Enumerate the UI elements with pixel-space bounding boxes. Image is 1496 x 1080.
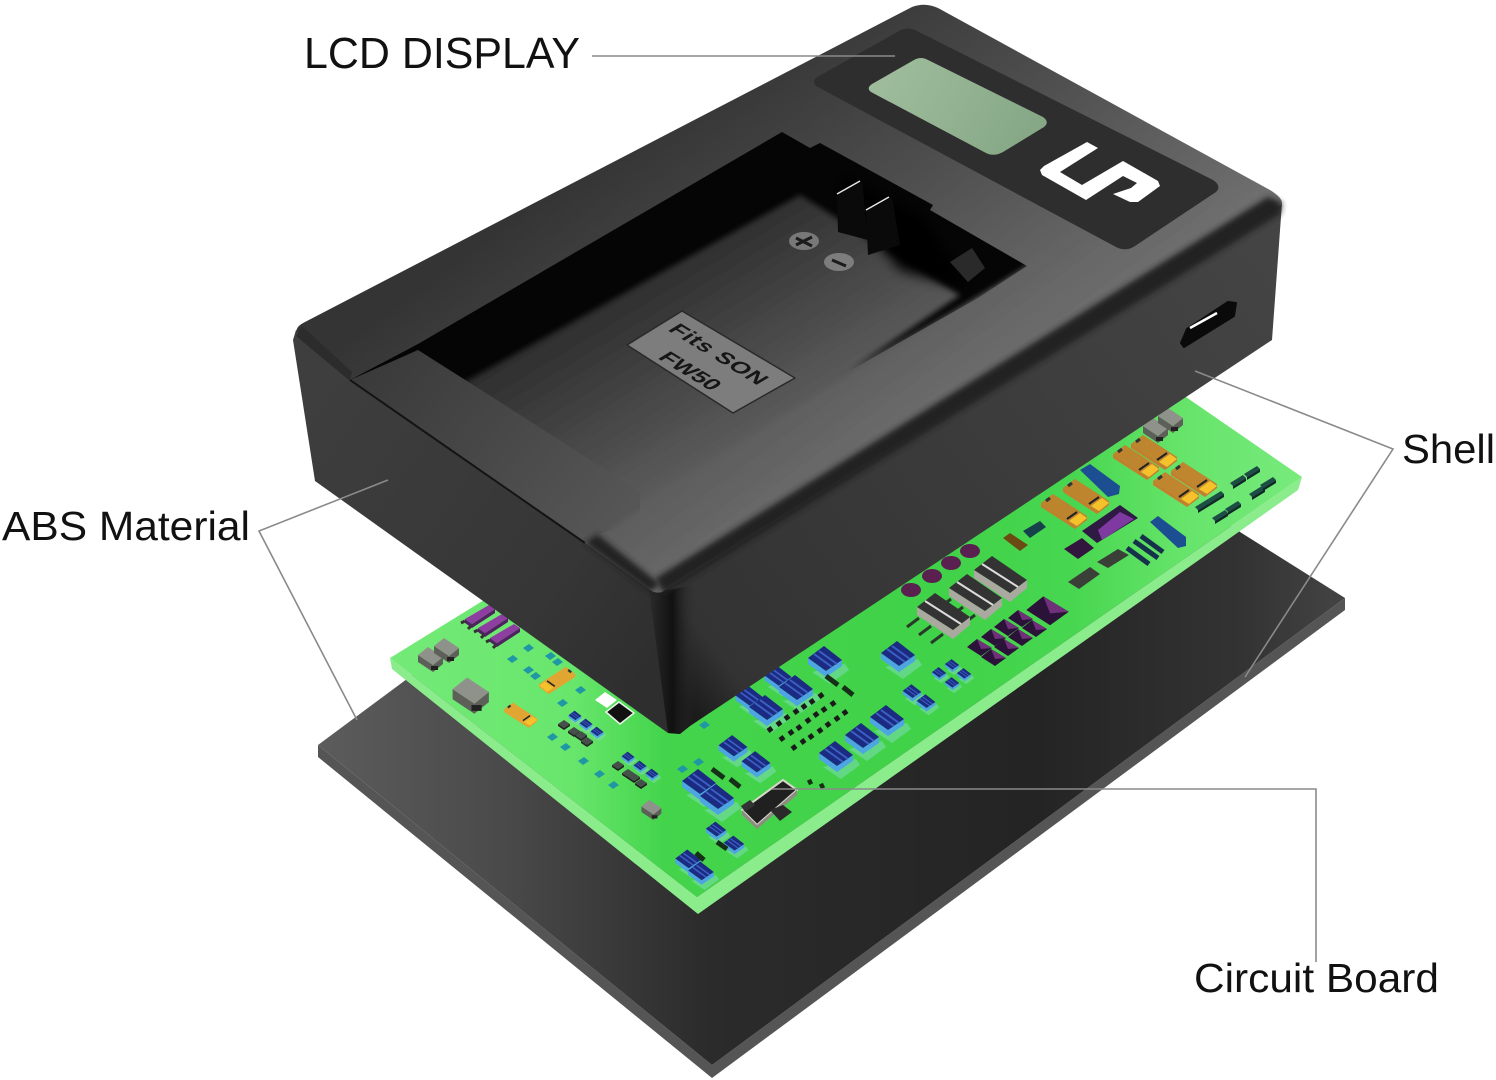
LP logo <box>1040 142 1160 202</box>
circuit board <box>390 395 1302 914</box>
silver parts right <box>1143 408 1183 443</box>
bottom plate <box>318 380 1345 1078</box>
cavity floor <box>458 195 1000 500</box>
dark corner chamfer <box>296 326 352 381</box>
polarity marks <box>789 232 854 271</box>
blue chips <box>675 641 974 890</box>
board front lip <box>390 477 1302 914</box>
circuit board callout <box>772 789 1439 1001</box>
label: Circuit Board: Circuit Board <box>1194 955 1439 1001</box>
top face front blend <box>610 190 1255 575</box>
top face <box>297 5 1282 593</box>
orange capacitors left <box>504 667 575 728</box>
label text: Fits SON <box>663 320 774 388</box>
black pad grid <box>768 694 847 749</box>
model text: FW50 <box>653 348 727 394</box>
left side face <box>293 330 690 733</box>
teal tiny parts <box>507 644 710 789</box>
small blue parts left <box>558 711 661 820</box>
right side face <box>657 203 1282 734</box>
board top face <box>390 395 1302 897</box>
silver inductors <box>418 638 489 714</box>
teal pairs right <box>1195 466 1276 524</box>
step strip <box>350 350 640 543</box>
large dark chips <box>907 556 1027 643</box>
charger case <box>293 5 1282 734</box>
small switches <box>1068 549 1129 589</box>
ABS material callout <box>2 480 388 720</box>
contact pocket shade <box>840 175 970 290</box>
step shadow line <box>350 380 585 543</box>
micro USB port <box>1181 302 1236 347</box>
slide switch <box>741 780 797 829</box>
blue bars <box>1080 464 1186 548</box>
dark edge chamfer left <box>585 534 660 592</box>
dark edge chamfer right <box>656 197 1282 594</box>
LCD screen <box>869 58 1047 155</box>
battery cavity <box>350 132 1027 480</box>
front vertical corner <box>648 582 696 734</box>
purple chips left <box>461 605 520 648</box>
label: Shell: Shell <box>1402 426 1495 472</box>
stripe connector <box>1127 536 1163 564</box>
dark clip pairs <box>696 676 853 860</box>
label: LCD display: LCD DISPLAY <box>304 29 580 78</box>
purple pyramid grid <box>967 596 1069 666</box>
orange capacitors right <box>1041 435 1217 529</box>
purple dots <box>901 544 980 597</box>
white and black switch <box>595 692 634 724</box>
small brown and teal chips <box>1003 521 1046 551</box>
label: ABS Material: ABS Material <box>2 503 250 549</box>
battery contacts <box>837 180 985 282</box>
purple large chips <box>1064 505 1138 559</box>
shell callout <box>1195 371 1495 677</box>
display panel <box>814 28 1218 249</box>
fits label plate <box>627 311 795 413</box>
